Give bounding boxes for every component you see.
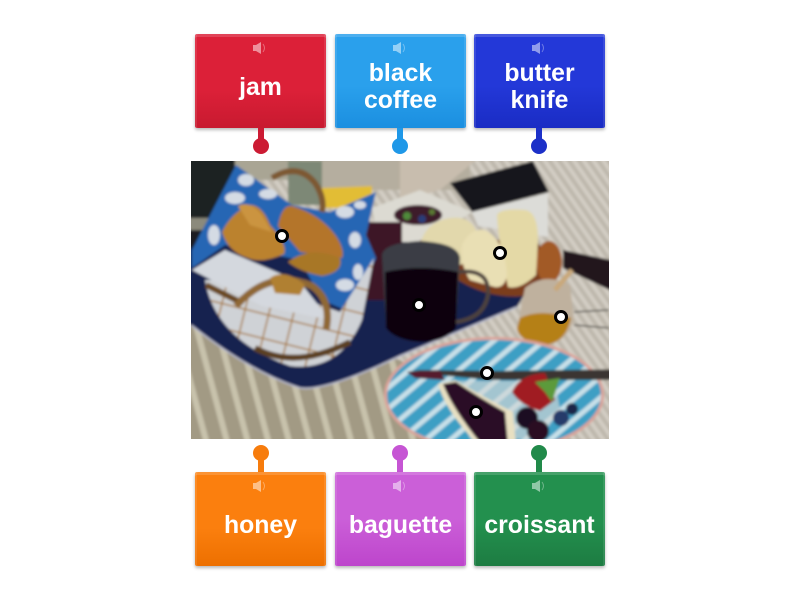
jam jar: [362, 222, 402, 300]
tray: [170, 230, 530, 388]
label card: baguette: baguette: [349, 512, 452, 538]
label card: black coffee: coffee: [364, 87, 437, 114]
label card: croissant: croissant: [484, 512, 595, 538]
label card: croissant: [474, 472, 605, 566]
connector: baguette: [392, 445, 408, 472]
label card: jam: jam: [239, 74, 282, 100]
photo: breakfast table: [191, 161, 609, 439]
hotspot: butter knife: [480, 366, 494, 380]
basket back handle: [272, 171, 323, 212]
connector: butter knife: [531, 128, 547, 154]
label card: black coffee: [335, 34, 466, 128]
blue napkin: [192, 165, 376, 312]
label card: butter knife: butter: [504, 60, 575, 87]
connector: black coffee: [392, 128, 408, 154]
connector: croissant: [531, 445, 547, 472]
book: [450, 161, 620, 295]
hotspot: baguette: [493, 246, 507, 260]
knife: [407, 369, 625, 380]
label card: baguette: [335, 472, 466, 566]
label card: honey: [195, 472, 326, 566]
berry bowl: [372, 190, 472, 242]
plate: [384, 337, 625, 453]
hotspot: honey: [554, 310, 568, 324]
croissants: [222, 204, 343, 295]
baguette bowl: [420, 210, 562, 297]
hotspot: croissant: [275, 229, 289, 243]
label card: jam: [195, 34, 326, 128]
table background: [170, 140, 630, 460]
honey jar: [517, 270, 609, 345]
juice glass: [288, 161, 322, 205]
label card: butter knife: [474, 34, 605, 128]
label card: butter knife: knife: [511, 87, 568, 114]
coffee cup: [382, 241, 488, 342]
strawberry: [512, 373, 555, 411]
berries: [516, 407, 538, 429]
connector: honey: [253, 445, 269, 472]
label card: honey: honey: [224, 512, 297, 538]
label card: black coffee: black: [369, 60, 432, 87]
basket: [192, 250, 374, 367]
connector: jam: [253, 128, 269, 154]
bread with jam: [438, 380, 516, 445]
hotspot: jam: [469, 405, 483, 419]
hotspot: black coffee: [412, 298, 426, 312]
